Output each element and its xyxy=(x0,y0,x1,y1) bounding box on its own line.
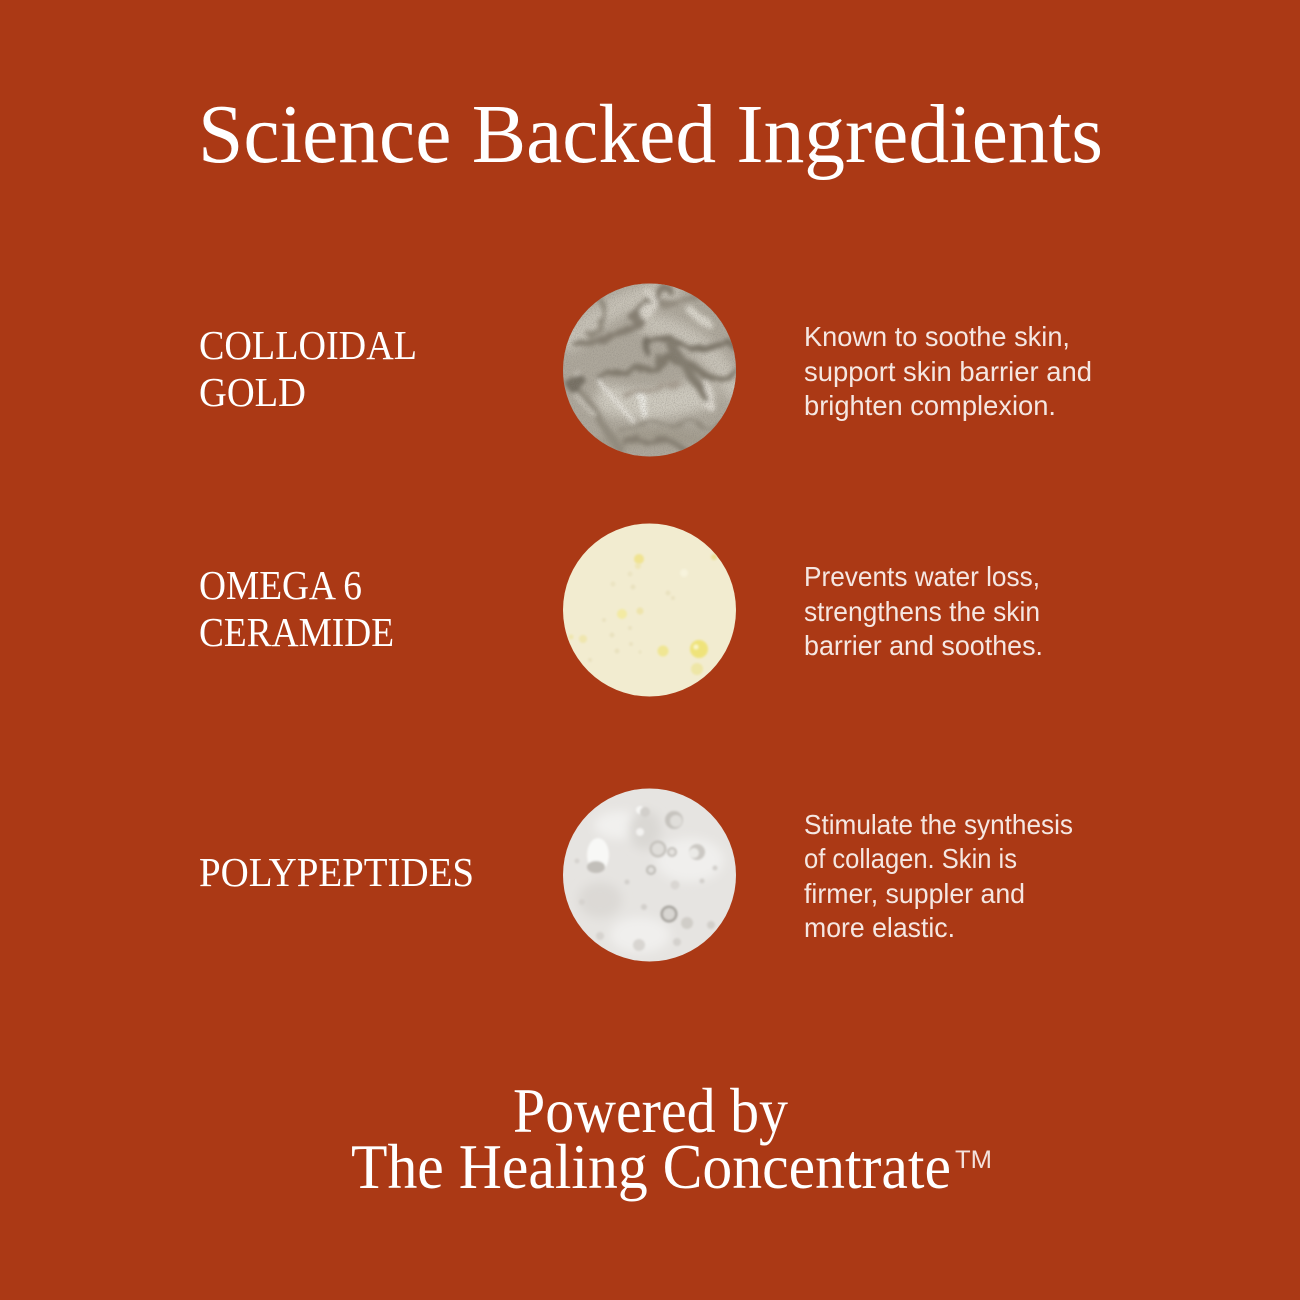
swatch: clear gel bubbles xyxy=(563,788,737,962)
ingredient name: colloidal gold: GOLD xyxy=(199,369,306,415)
description: polypeptides xyxy=(804,809,1073,943)
description: colloidal gold: support skin barrier and xyxy=(804,356,1092,387)
description: polypeptides: Stimulate the synthesis xyxy=(804,809,1073,840)
ingredient name: polypeptides: POLYPEPTIDES xyxy=(199,849,474,895)
description: omega 6 ceramide: Prevents water loss, xyxy=(804,561,1040,592)
swatch: pale yellow oil droplets xyxy=(563,523,737,697)
ingredient name: omega 6 ceramide xyxy=(199,562,394,655)
description: omega 6 ceramide: strengthens the skin xyxy=(804,596,1040,627)
footer: powered by: TM xyxy=(955,1146,992,1174)
description: polypeptides: more elastic. xyxy=(804,912,955,943)
row: omega 6 ceramide xyxy=(199,523,1043,697)
title: Science Backed Ingredients xyxy=(198,88,1103,181)
ingredient name: omega 6 ceramide: CERAMIDE xyxy=(199,609,394,655)
ingredient name: omega 6 ceramide: OMEGA 6 xyxy=(199,562,362,608)
footer: powered by: Powered by xyxy=(513,1076,788,1146)
row: polypeptides xyxy=(199,788,1073,962)
description: colloidal gold: brighten complexion. xyxy=(804,390,1056,421)
description: omega 6 ceramide xyxy=(804,561,1043,661)
ingredient name: colloidal gold xyxy=(199,322,417,415)
description: colloidal gold: Known to soothe skin, xyxy=(804,321,1070,352)
description: polypeptides: of collagen. Skin is xyxy=(804,843,1017,874)
row: colloidal gold xyxy=(199,283,1092,457)
ingredient name: colloidal gold: COLLOIDAL xyxy=(199,322,417,368)
swatch: metallic gold swirl texture xyxy=(563,283,737,457)
description: polypeptides: firmer, suppler and xyxy=(804,878,1025,909)
footer: powered by xyxy=(351,1076,992,1202)
footer: powered by: The Healing Concentrate xyxy=(351,1132,951,1202)
description: omega 6 ceramide: barrier and soothes. xyxy=(804,630,1043,661)
description: colloidal gold xyxy=(804,321,1092,421)
